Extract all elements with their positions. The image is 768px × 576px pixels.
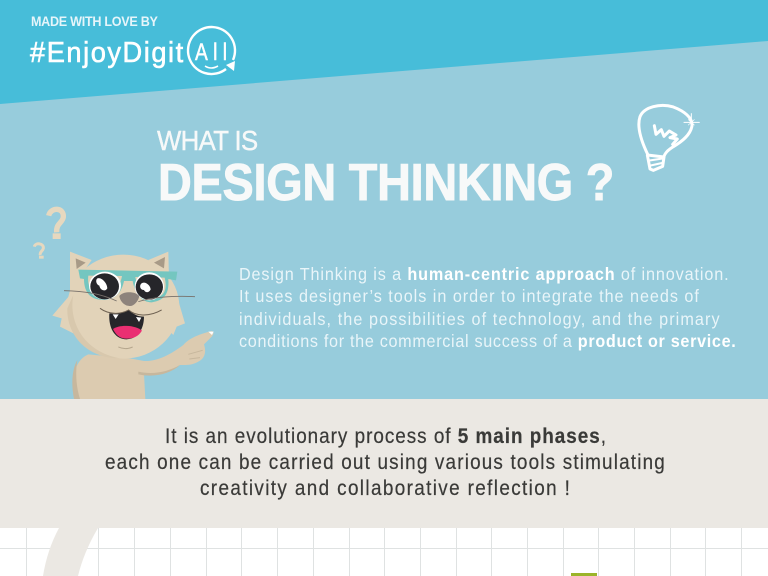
ears <box>76 258 86 269</box>
heading: what is: WHAT IS <box>157 125 258 156</box>
line 2: each one can be carried out using various tools stimulating <box>105 451 665 474</box>
line 4: conditions for the commercial success of a product or service. <box>239 331 736 351</box>
whiskers <box>64 291 195 302</box>
title <box>157 125 614 212</box>
text: hashtag: #EnjoyDigit <box>30 36 183 68</box>
icon: All circle <box>188 27 235 74</box>
hand detail <box>188 350 203 359</box>
logo: made with love by #EnjoyDigitAll <box>30 13 235 74</box>
icon: light bulb <box>639 105 699 170</box>
head <box>52 252 185 359</box>
panel: light blue hero background <box>0 0 768 399</box>
line 3: creativity and collaborative reflection ! <box>200 477 570 500</box>
panel: phases intro band <box>0 399 768 528</box>
text: design thinking description <box>239 264 736 351</box>
line 3: individuals, the possibilities of technology, and the primary <box>239 309 720 329</box>
glasses <box>78 270 177 302</box>
decorative number shape <box>43 528 98 576</box>
body and arm <box>73 331 213 399</box>
line 2: It uses designer’s tools in order to integrate the needs of <box>239 286 699 306</box>
panel: top banner <box>0 0 768 104</box>
eyes <box>89 272 121 300</box>
icon: All circle: All <box>195 38 227 66</box>
heading: design thinking: DESIGN THINKING ? <box>158 154 614 212</box>
nose <box>119 292 139 306</box>
text: made with love by: MADE WITH LOVE BY <box>31 13 158 29</box>
text: phases intro <box>105 425 665 500</box>
green marker <box>571 573 597 576</box>
line 1: Design Thinking is a human-centric approach of innovation. <box>239 264 729 284</box>
character: cat with glasses <box>34 209 214 399</box>
icon: question marks <box>34 209 63 259</box>
mouth <box>109 310 144 339</box>
line 1: It is an evolutionary process of 5 main phases, <box>165 425 606 448</box>
